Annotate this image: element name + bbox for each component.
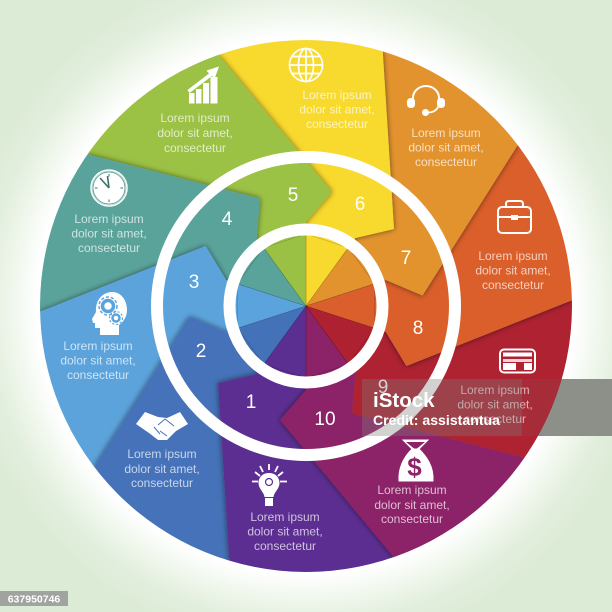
text block segment 7: Lorem ipsum <box>411 126 481 140</box>
segment 2 <box>94 306 306 561</box>
segment 10 overlap on segment 1 <box>278 373 524 558</box>
icon: briefcase <box>498 201 531 233</box>
text block segment 1: Lorem ipsum <box>250 510 320 524</box>
wheel of ten spiral segments <box>40 40 572 572</box>
number 1: 1 <box>246 392 256 413</box>
text block segment 8: dolor sit amet, <box>475 264 551 278</box>
text block segment 7: consectetur <box>415 155 477 169</box>
text block segment 9: dolor sit amet, <box>457 398 533 412</box>
segment 1 <box>218 306 394 572</box>
icon: rising bar chart <box>188 66 219 104</box>
icon: clock <box>91 170 127 206</box>
text block segment 4: consectetur <box>78 241 140 255</box>
watermark band behind wheel <box>500 379 612 436</box>
number 4: 4 <box>222 209 233 230</box>
text block segment 2: Lorem ipsum <box>127 447 197 461</box>
icon: light bulb <box>252 464 287 506</box>
text block segment 2: dolor sit amet, <box>124 462 200 476</box>
segment 7 <box>306 51 518 306</box>
text block segment 10: Lorem ipsum <box>377 483 447 497</box>
icon: money bag: $ <box>407 452 422 482</box>
text block segment 2: consectetur <box>131 476 193 490</box>
icon: head with gears <box>92 292 127 335</box>
text block segment 5: Lorem ipsum <box>160 111 230 125</box>
icon: handshake <box>136 412 188 440</box>
number 7: 7 <box>401 248 411 269</box>
number 3: 3 <box>189 272 199 293</box>
watermark credit: Credit: assistantua <box>373 413 500 428</box>
text block segment 10: consectetur <box>381 512 443 526</box>
text block segment 3: dolor sit amet, <box>60 354 136 368</box>
text block segment 8: consectetur <box>482 278 544 292</box>
text block segment 1: consectetur <box>254 539 316 553</box>
segment 6 <box>218 40 394 306</box>
text block segment 6: Lorem ipsum <box>302 88 372 102</box>
watermark logo: iStock <box>373 389 435 412</box>
icon: credit card <box>500 350 535 372</box>
text block segment 6: consectetur <box>306 117 368 131</box>
text block segment 9: consectetur <box>464 412 526 426</box>
text block segment 7: dolor sit amet, <box>408 140 484 154</box>
text block segment 10: dolor sit amet, <box>374 498 450 512</box>
text block segment 5: consectetur <box>164 141 226 155</box>
central pie of flat wedges <box>238 234 374 378</box>
text block segment 6: dolor sit amet, <box>299 102 375 116</box>
watermark band <box>362 379 612 436</box>
outer white ring <box>157 157 455 455</box>
text block segment 9: Lorem ipsum <box>460 383 530 397</box>
icon: headset <box>407 86 445 116</box>
segment 4 <box>40 154 306 312</box>
text block segment 8: Lorem ipsum <box>478 249 548 263</box>
segment 5 <box>87 55 332 306</box>
image id tag <box>0 591 68 606</box>
text block segment 5: dolor sit amet, <box>157 126 233 140</box>
segment 8 <box>306 145 572 366</box>
text block segment 4: dolor sit amet, <box>71 226 147 240</box>
icon: globe <box>290 48 322 82</box>
number 5: 5 <box>288 185 298 206</box>
number 8: 8 <box>413 318 423 339</box>
number 10: 10 <box>314 409 336 430</box>
text block segment 3: consectetur <box>67 368 129 382</box>
image id tag: 637950746 <box>8 594 60 606</box>
icon: money bag <box>399 440 433 482</box>
number 2: 2 <box>196 341 206 362</box>
step numbers <box>189 185 423 430</box>
segment 3 <box>40 246 306 467</box>
segment 10 base <box>280 373 524 558</box>
number 9: 9 <box>378 377 388 398</box>
text block segment 1: dolor sit amet, <box>247 524 323 538</box>
inner white ring <box>230 230 382 382</box>
text block segment 4: Lorem ipsum <box>74 212 144 226</box>
segment 9 <box>306 300 572 458</box>
number 6: 6 <box>355 194 365 215</box>
text block segment 3: Lorem ipsum <box>63 339 133 353</box>
